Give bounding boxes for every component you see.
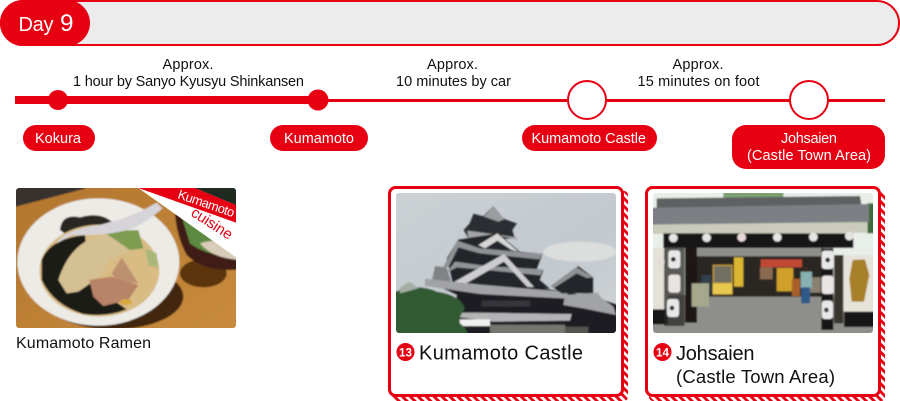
travel time: car: 10 minutes by car [396,74,511,90]
stop marker: Kumamoto [308,90,328,110]
ground [653,294,873,333]
panel: Kumamoto Ramen: cuisine [188,204,236,243]
walls [653,248,668,311]
day badge: Day [18,14,54,36]
beam and posts [663,233,853,248]
people [702,275,711,292]
roof [657,196,862,208]
number badge 13: 13 [399,346,412,360]
card frame [390,188,622,396]
panel: Kumamoto Castle card [387,183,628,401]
header bar: Day 9 [0,0,899,46]
side bowl [174,214,236,271]
caption: Johsaien: Johsaien [676,343,754,365]
shops [697,248,823,297]
travel time: Shinkansen: Approx. [162,57,214,73]
station label: Kokura: Kokura [35,131,82,147]
small turret [551,266,593,293]
photo: castle [396,193,616,333]
middle tier [447,233,550,288]
stop marker: Kokura [48,90,68,110]
ribbon: Kumamoto cuisine [138,188,236,257]
main bowl [17,198,179,326]
caption: Castle Town Area: (Castle Town Area) [676,366,835,387]
panel: Kumamoto Ramen: Kumamoto [176,187,237,220]
pork [112,257,138,283]
panel: Kumamoto Ramen [16,188,236,348]
panel: Johsaien card [643,183,885,401]
caption: Kumamoto Castle: Kumamoto Castle [419,342,583,364]
travel time: car [396,57,511,90]
travel time: car: Approx. [427,57,478,73]
travel time: on foot: Approx. [672,57,724,73]
station label: Johsaien: (Castle Town Area) [747,148,871,164]
station label: Kokura [23,125,95,151]
striped shadow [392,191,628,401]
card frame [646,188,880,396]
station label: Kumamoto Castle [522,125,657,151]
tree [396,286,468,333]
spoon [57,203,163,243]
travel time: Shinkansen: 1 hour by Sanyo Kyusyu Shinkansen [73,74,304,90]
number badge 14 [654,343,672,361]
striped shadow [649,191,885,401]
travel time: on foot: 15 minutes on foot [638,74,760,90]
stop marker: Johsaien [790,81,828,119]
station label: Johsaien [732,125,885,169]
station label: Johsaien: Johsaien [781,131,837,147]
station label: Kumamoto [270,125,368,151]
number badge 13 [396,343,414,361]
number badge 14: 14 [656,346,669,360]
station label: Kumamoto: Kumamoto [284,131,354,147]
travel time: on foot [638,57,760,90]
top tier [463,206,517,242]
route line [15,81,885,119]
lanterns [669,234,678,242]
day badge [0,0,90,46]
travel time: Shinkansen [73,57,304,90]
station label: Kumamoto Castle: Kumamoto Castle [532,131,646,147]
photo: ramen bowl [16,188,236,328]
wooden sign [849,259,869,302]
stop marker: Kumamoto Castle [568,81,606,119]
photo: castle town gate [653,193,873,333]
caption: Kumamoto Ramen: Kumamoto Ramen [16,335,151,352]
lower main [443,286,616,333]
day badge: 9 [60,10,74,37]
